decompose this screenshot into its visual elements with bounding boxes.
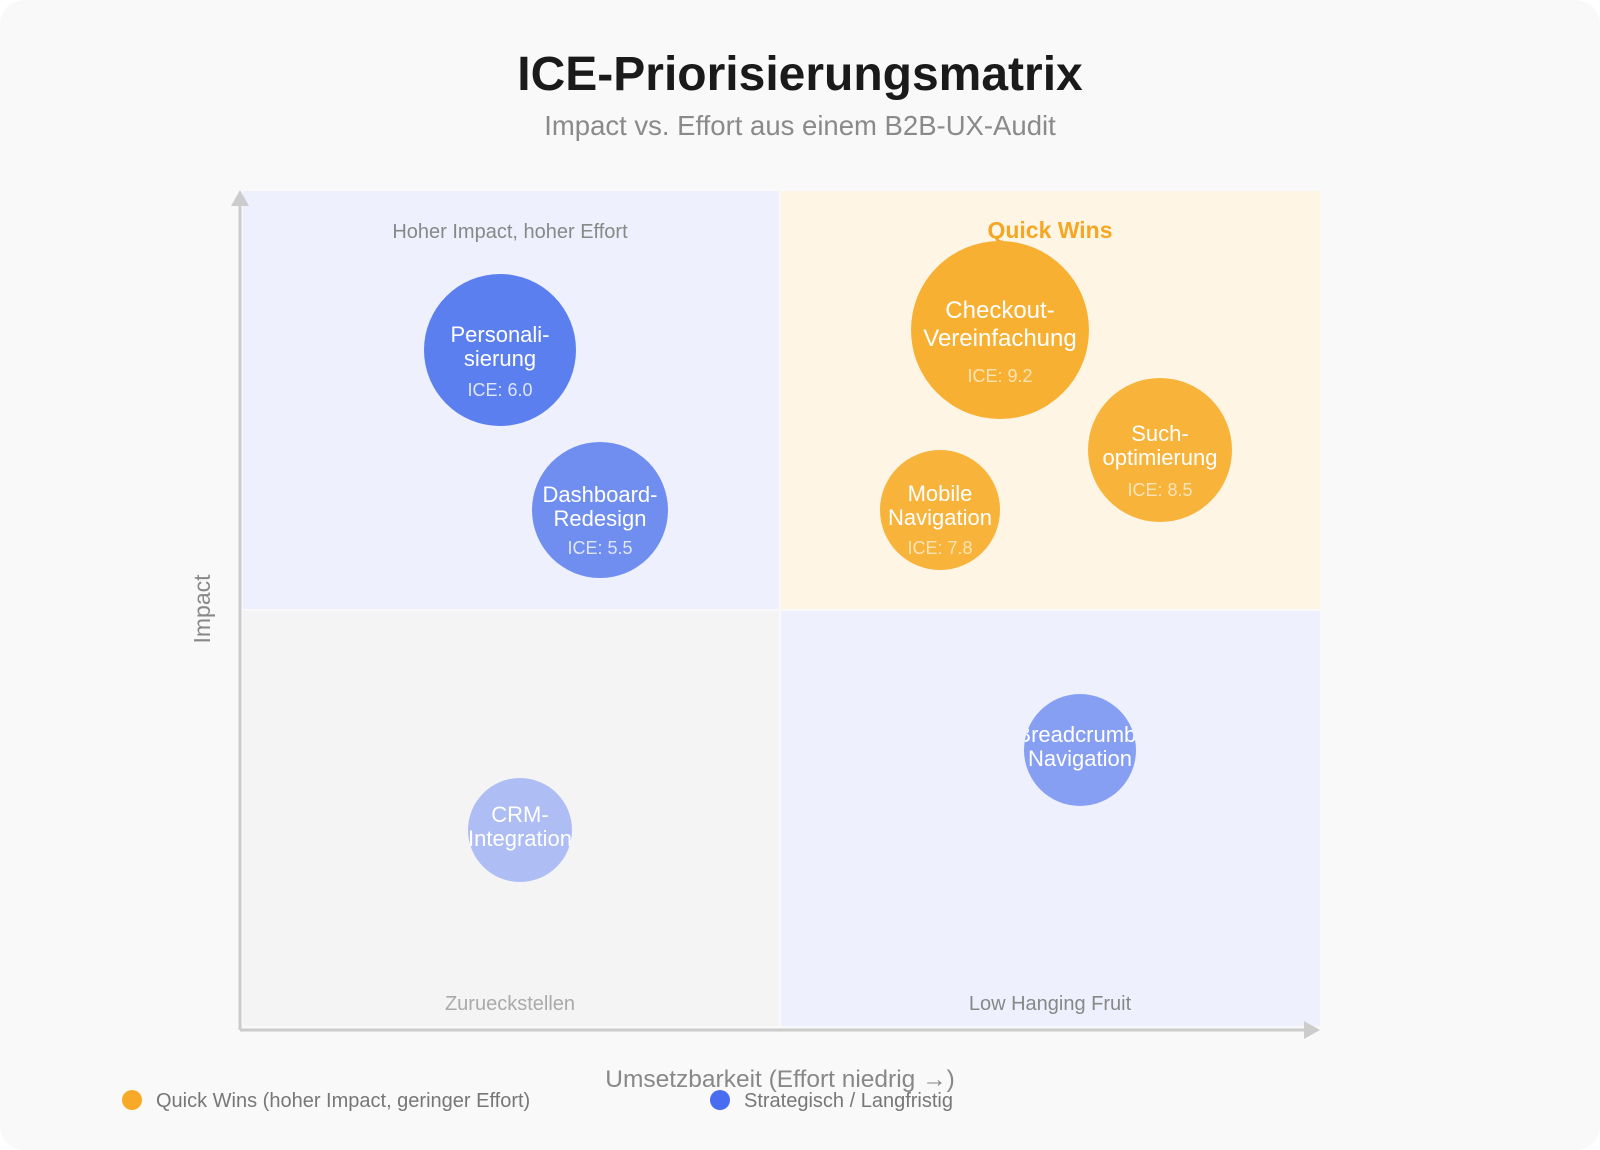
bubble: Checkout-Vereinfachung: Checkout-	[945, 297, 1055, 324]
legend: strategisch: Strategisch / Langfristig	[744, 1090, 953, 1112]
bubble: Dashboard-Redesign: Redesign	[554, 506, 646, 531]
bubble: Dashboard-Redesign: ICE: 5.5	[567, 538, 633, 558]
bubble: Breadcrumb-Navigation: Navigation	[1028, 746, 1132, 771]
y axis arrow	[231, 190, 249, 1030]
quadrant: low hanging fruit	[781, 611, 1320, 1026]
quadrant: quick wins	[781, 191, 1320, 609]
bubble: CRM-Integration: CRM-	[491, 802, 549, 827]
bubble: Checkout-Vereinfachung	[911, 241, 1089, 419]
quadrant: zurueckstellen: Zurueckstellen	[445, 993, 575, 1015]
bubble: Mobile Navigation: Mobile	[908, 481, 972, 506]
quadrant: low hanging fruit: Low Hanging Fruit	[969, 993, 1132, 1015]
bubble: Breadcrumb-Navigation: Breadcrumb-	[1016, 722, 1144, 747]
quadrant: quick wins: Quick Wins	[987, 217, 1113, 243]
bubble: Mobile Navigation	[880, 450, 1000, 570]
title: ICE-Priorisierungsmatrix	[517, 48, 1083, 101]
bubble: Personalisierung: ICE: 6.0	[467, 380, 533, 400]
quadrant: zurueckstellen	[243, 611, 779, 1026]
bubble: Such-optimierung: Such-	[1131, 421, 1189, 446]
bubble: Personalisierung: Personali-	[450, 322, 550, 347]
bubble: Such-optimierung	[1088, 378, 1232, 522]
legend: quick wins: Quick Wins (hoher Impact, geringer Effort)	[156, 1090, 530, 1112]
bubble: Checkout-Vereinfachung: ICE: 9.2	[967, 366, 1033, 386]
bubble: Such-optimierung: optimierung	[1103, 445, 1217, 470]
bubble: CRM-Integration	[468, 778, 572, 882]
subtitle: Impact vs. Effort aus einem B2B-UX-Audit	[544, 110, 1056, 141]
bubble: Mobile Navigation: Navigation	[888, 505, 992, 530]
bubble: Such-optimierung: ICE: 8.5	[1127, 480, 1193, 500]
bubble: Dashboard-Redesign	[532, 442, 668, 578]
bubble: Checkout-Vereinfachung: Vereinfachung	[923, 325, 1077, 352]
bubble: Personalisierung: sierung	[464, 346, 536, 371]
bubble: Dashboard-Redesign: Dashboard-	[543, 482, 657, 507]
bubble: Breadcrumb-Navigation	[1024, 694, 1136, 806]
bubble: CRM-Integration: Integration	[468, 826, 572, 851]
y axis label: Impact	[189, 574, 215, 644]
x axis arrow	[240, 1021, 1320, 1039]
x axis label: Umsetzbarkeit (Effort niedrig →)	[605, 1066, 955, 1093]
quadrant: high impact high effort: Hoher Impact, hoher Effort	[392, 221, 628, 243]
bubble: Mobile Navigation: ICE: 7.8	[907, 538, 973, 558]
quadrant: high impact high effort	[243, 191, 779, 609]
bubble: Personalisierung	[424, 274, 576, 426]
